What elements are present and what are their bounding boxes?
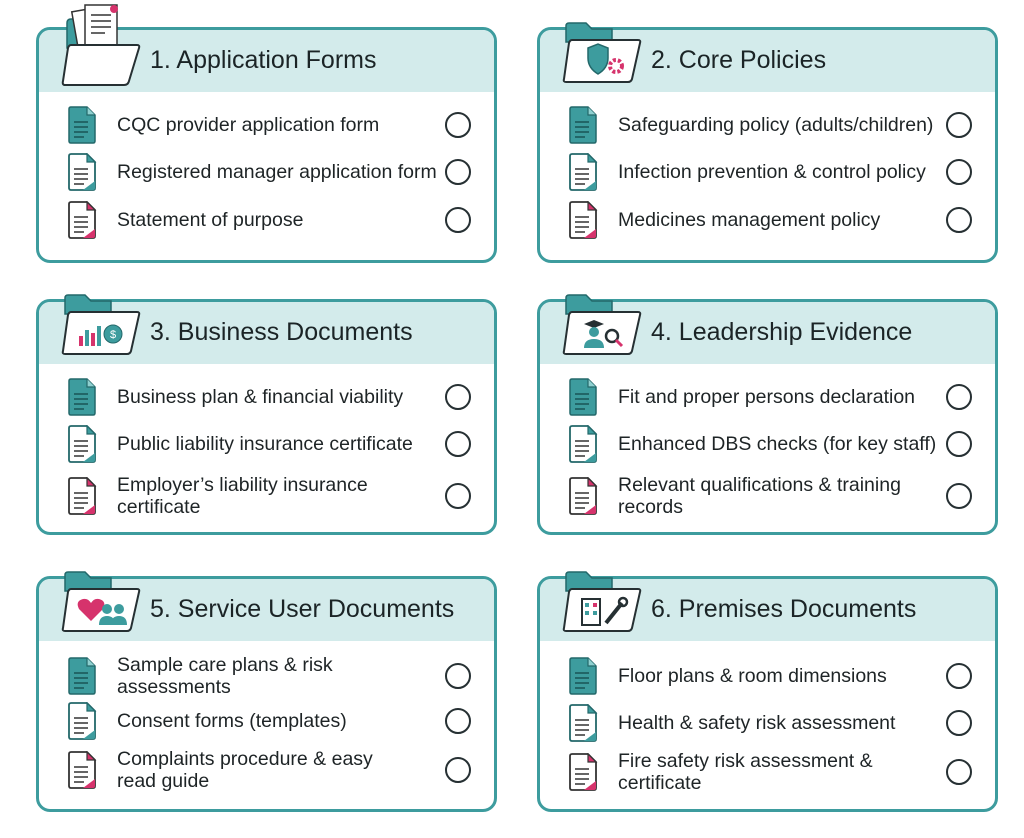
icon: folder with chart and money bag: $ — [110, 329, 116, 341]
item: Fit and proper persons declaration: Fit and proper persons declaration — [618, 386, 915, 408]
item: Employer's liability insurance certificate: Employer’s liability insurance — [117, 474, 368, 496]
item: Employer's liability insurance certificate: certificate — [117, 496, 200, 518]
item: Fit and proper persons declaration — [569, 378, 972, 416]
item: Floor plans & room dimensions: Floor plans & room dimensions — [618, 665, 887, 687]
item: Registered manager application form: Registered manager application form — [117, 161, 437, 183]
panel: 3. Business Documents — [36, 299, 497, 535]
item: Complaints procedure & easy read guide: read guide — [117, 770, 209, 792]
item: Enhanced DBS checks — [569, 425, 972, 463]
panel: 1. Application Forms — [36, 27, 497, 263]
item: Consent forms (templates): Consent forms (templates) — [117, 710, 347, 732]
item: Health & safety risk assessment: Health & safety risk assessment — [618, 712, 895, 734]
item: Fire safety risk assessment & certificate: Fire safety risk assessment & — [618, 750, 873, 772]
item: Fire safety risk assessment & certificate — [569, 750, 972, 794]
heading: 2. Core Policies — [651, 46, 826, 74]
heading: 4. Leadership Evidence — [651, 318, 912, 346]
panel: 2. Core Policies — [537, 27, 998, 263]
icon: folder with papers — [62, 4, 140, 86]
item: Enhanced DBS checks: Enhanced DBS checks (for key staff) — [618, 433, 936, 455]
item: Sample care plans & risk assessments: assessments — [117, 676, 231, 698]
item: Statement of purpose: Statement of purpose — [117, 209, 303, 231]
item: Statement of purpose — [68, 201, 471, 239]
item: Sample care plans & risk assessments — [68, 654, 471, 698]
item: Consent forms (templates) — [68, 702, 471, 740]
item: Floor plans & room dimensions — [569, 657, 972, 695]
item: Complaints procedure & easy read guide — [68, 748, 471, 792]
item: Business plan & financial viability — [68, 378, 471, 416]
item: CQC provider application form: CQC provider application form — [117, 114, 379, 136]
icon: folder with building and wrench — [562, 571, 642, 632]
item: Infection prevention & control policy: Infection prevention & control policy — [618, 161, 926, 183]
item: Complaints procedure & easy read guide: Complaints procedure & easy — [117, 748, 373, 770]
item: Business plan & financial viability: Business plan & financial viability — [117, 386, 403, 408]
heading: 5. Service User Documents — [150, 595, 454, 623]
panel: 4. Leadership Evidence — [537, 299, 998, 535]
panel: 6. Premises Documents — [537, 576, 998, 812]
item: CQC provider application form — [68, 106, 471, 144]
icon: folder with heart and people — [62, 571, 140, 632]
item: Sample care plans & risk assessments: Sample care plans & risk — [117, 654, 333, 676]
panel: 5. Service User Documents — [36, 576, 497, 812]
icon: folder with chart and money bag — [62, 294, 140, 355]
item: Relevant qualifications & training records: Relevant qualifications & training — [618, 474, 901, 496]
item: Relevant qualifications & training records — [569, 474, 972, 518]
item: Medicines management policy — [569, 201, 972, 239]
item: Medicines management policy: Medicines management policy — [618, 209, 880, 231]
item: Fire safety risk assessment & certificate: certificate — [618, 772, 701, 794]
item: Public liability insurance certificate — [68, 425, 471, 463]
item: Safeguarding policy: Safeguarding policy (adults/children) — [618, 114, 933, 136]
heading: 6. Premises Documents — [651, 595, 916, 623]
item: Employer's liability insurance certificate — [68, 474, 471, 518]
item: Safeguarding policy — [569, 106, 972, 144]
icon: folder with shield and gear — [562, 22, 642, 83]
item: Public liability insurance certificate: Public liability insurance certificate — [117, 433, 413, 455]
icon: folder with graduate and magnifier — [562, 294, 642, 355]
item: Health & safety risk assessment — [569, 704, 972, 742]
item: Relevant qualifications & training records: records — [618, 496, 683, 518]
item: Infection prevention & control policy — [569, 153, 972, 191]
heading: 1. Application Forms — [150, 46, 376, 74]
heading: 3. Business Documents — [150, 318, 413, 346]
item: Registered manager application form — [68, 153, 471, 191]
